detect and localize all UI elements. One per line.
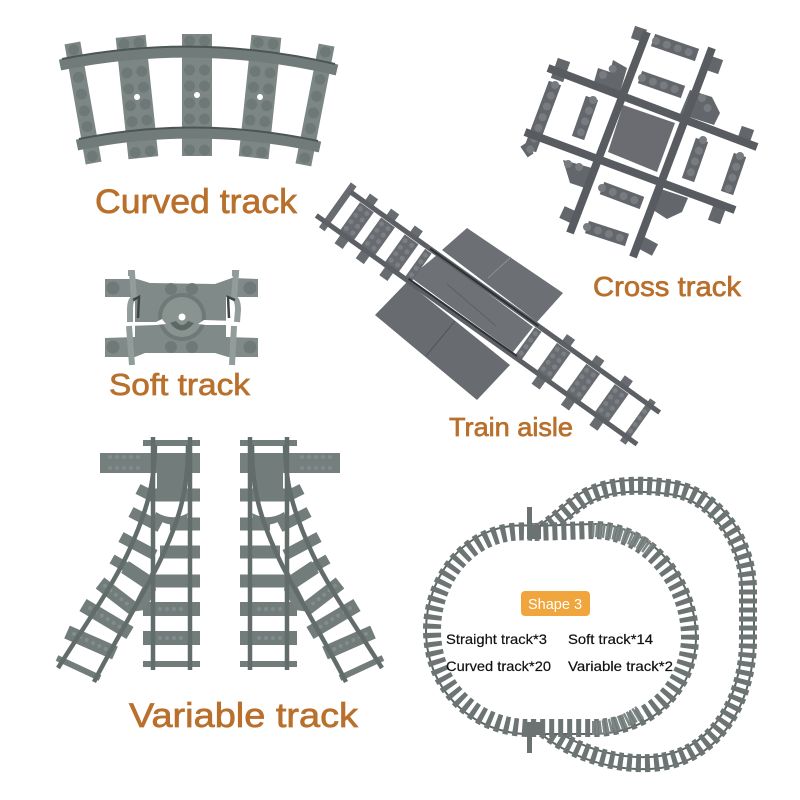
switch: right-hand mirror (240, 437, 383, 682)
cross track piece (524, 32, 757, 257)
variable track switches (57, 437, 383, 682)
soft track piece (105, 273, 258, 365)
badge: Shape 3 (521, 591, 590, 616)
shape 3 layout diagram (432, 486, 748, 763)
parts list: Soft track*14 (568, 631, 653, 647)
label: Soft track: Soft track (109, 367, 251, 402)
label: Train aisle: Train aisle (449, 412, 573, 442)
inner loop track (432, 530, 690, 728)
label: Curved track: Curved track (95, 183, 298, 221)
label: Variable track: Variable track (129, 697, 359, 735)
parts list: Variable track*2 (568, 658, 673, 674)
switch: left-hand (57, 437, 200, 682)
parts list: Curved track*20 (446, 658, 551, 674)
badge: Shape 3: Shape 3 (528, 597, 582, 613)
outer loop track (543, 486, 748, 763)
parts list: Straight track*3 (446, 631, 547, 647)
train aisle piece (309, 176, 665, 454)
label: Cross track: Cross track (593, 271, 742, 302)
soft track sections and switches (527, 507, 651, 753)
parts list (446, 631, 673, 674)
curved track piece (60, 34, 337, 166)
